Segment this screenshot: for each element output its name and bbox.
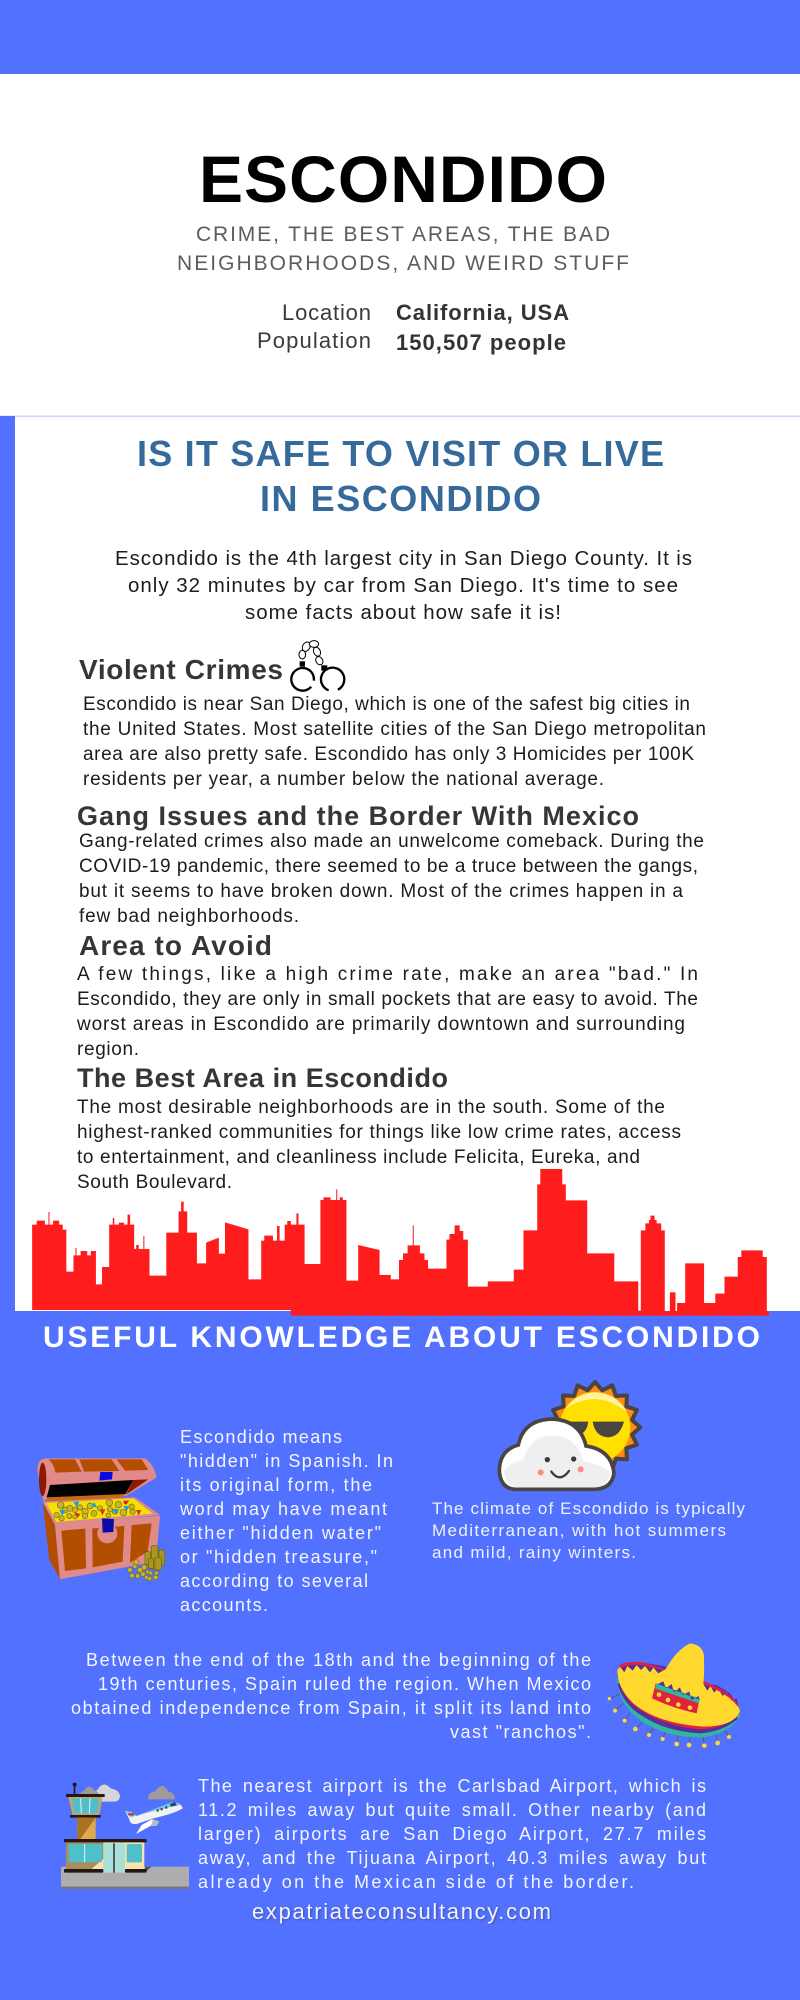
heading: area to avoid: Area to Avoid [79, 930, 272, 961]
location and population facts: Location [282, 300, 371, 325]
text: airports: away, and the Tijuana Airport, 40.3 miles away but [198, 1848, 706, 1868]
text: gang issues: but it seems to have broken down. Most of the crimes happen in a [79, 881, 683, 902]
safety heading: IS IT SAFE TO VISIT OR LIVE [137, 433, 664, 474]
text: violent crimes: residents per year, a number below the national average. [83, 769, 604, 790]
text: violent crimes: area are also pretty safe. Escondido has only 3 Homicides per 100K [83, 744, 694, 765]
text: gang issues [79, 831, 704, 927]
text: violent crimes [83, 694, 706, 790]
text: gang issues: COVID-19 pandemic, there seemed to be a truce between the gangs, [79, 856, 698, 877]
text: meaning of the name [179, 1427, 393, 1615]
subtitle: NEIGHBORHOODS, AND WEIRD STUFF [177, 252, 629, 275]
text: best area [77, 1097, 681, 1193]
text: violent crimes: Escondido is near San Diego, which is one of the safest big cities in [83, 694, 690, 715]
text: airports: 11.2 miles away but quite small. Other nearby (and [198, 1800, 706, 1820]
text: best area: South Boulevard. [77, 1172, 232, 1193]
heading: best area: The Best Area in Escondido [77, 1063, 448, 1093]
icon: treasure chest [37, 1458, 165, 1581]
text: gang issues: few bad neighborhoods. [79, 906, 299, 927]
text: history: obtained independence from Spain, it split its land into [71, 1698, 591, 1718]
text: airports: The nearest airport is the Carlsbad Airport, which is [198, 1776, 706, 1796]
text: area to avoid: Escondido, they are only in small pockets that are easy to avoid. The [77, 989, 698, 1010]
text: violent crimes: the United States. Most satellite cities of the San Diego metropolitan [83, 719, 706, 740]
text: best area: The most desirable neighborhoods are in the south. Some of the [77, 1097, 665, 1118]
icon: handcuffs [288, 641, 348, 694]
website footer: expatriateconsultancy.com [252, 1899, 551, 1924]
text: meaning of the name: accounts. [180, 1595, 268, 1615]
text: airports: already on the Mexican side of the border. [198, 1872, 634, 1892]
intro paragraph: some facts about how safe it is! [245, 601, 561, 624]
intro paragraph: Escondido is the 4th largest city in San Diego County. It is [115, 547, 692, 570]
text: history [71, 1650, 591, 1742]
location and population facts: Population [257, 328, 371, 353]
safety heading: IN ESCONDIDO [260, 478, 541, 519]
location and population facts: California, USA [396, 300, 569, 325]
red city skyline [32, 1169, 769, 1316]
text: meaning of the name: word may have meant [179, 1499, 387, 1519]
text: meaning of the name: according to several [180, 1571, 368, 1591]
heading: gang issues: Gang Issues and the Border With Mexico [77, 801, 639, 831]
text: best area: highest-ranked communities for things like low crime rates, access [77, 1122, 681, 1143]
intro paragraph [115, 547, 692, 624]
useful knowledge heading: USEFUL KNOWLEDGE ABOUT ESCONDIDO [43, 1321, 760, 1354]
text: meaning of the name: or "hidden treasure," [180, 1547, 377, 1567]
text: area to avoid: worst areas in Escondido are primarily downtown and surrounding [76, 1014, 685, 1035]
icon: sun with sunglasses and cloud [499, 1382, 640, 1489]
heading: violent crimes: Violent Crimes [79, 654, 283, 685]
icon: sombrero [608, 1643, 741, 1748]
text: meaning of the name: its original form, the [180, 1475, 372, 1495]
text: climate: and mild, rainy winters. [432, 1543, 636, 1562]
top blue banner [0, 0, 800, 74]
text: meaning of the name: "hidden" in Spanish. In [180, 1451, 393, 1471]
subtitle: CRIME, THE BEST AREAS, THE BAD [196, 223, 610, 246]
icon: airport and plane [61, 1783, 189, 1889]
safety heading [137, 433, 664, 519]
subtitle [177, 223, 629, 275]
text: climate [432, 1499, 746, 1562]
location and population facts [257, 300, 569, 355]
location and population facts: 150,507 people [396, 330, 566, 355]
intro paragraph: only 32 minutes by car from San Diego. It's time to see [128, 574, 678, 597]
text: airports: larger) airports are San Diego Airport, 27.7 miles [198, 1824, 706, 1844]
text: climate: The climate of Escondido is typically [432, 1499, 746, 1518]
left blue strip [0, 416, 15, 1311]
text: airports [198, 1776, 706, 1892]
text: climate: Mediterranean, with hot summers [432, 1521, 726, 1540]
text: history: Between the end of the 18th and the beginning of the [86, 1650, 591, 1670]
title: ESCONDIDO [199, 142, 607, 216]
text: area to avoid: region. [77, 1039, 139, 1060]
text: gang issues: Gang-related crimes also made an unwelcome comeback. During the [79, 831, 704, 852]
text: best area: to entertainment, and cleanliness include Felicita, Eureka, and [77, 1147, 640, 1168]
text: area to avoid [76, 964, 698, 1060]
text: history: vast "ranchos". [450, 1722, 591, 1742]
text: meaning of the name: Escondido means [180, 1427, 342, 1447]
bottom blue panel [0, 1311, 800, 2000]
text: history: 19th centuries, Spain ruled the region. When Mexico [98, 1674, 591, 1694]
text: meaning of the name: either "hidden water" [180, 1523, 381, 1543]
text: area to avoid: A few things, like a high crime rate, make an area "bad." In [77, 964, 698, 985]
